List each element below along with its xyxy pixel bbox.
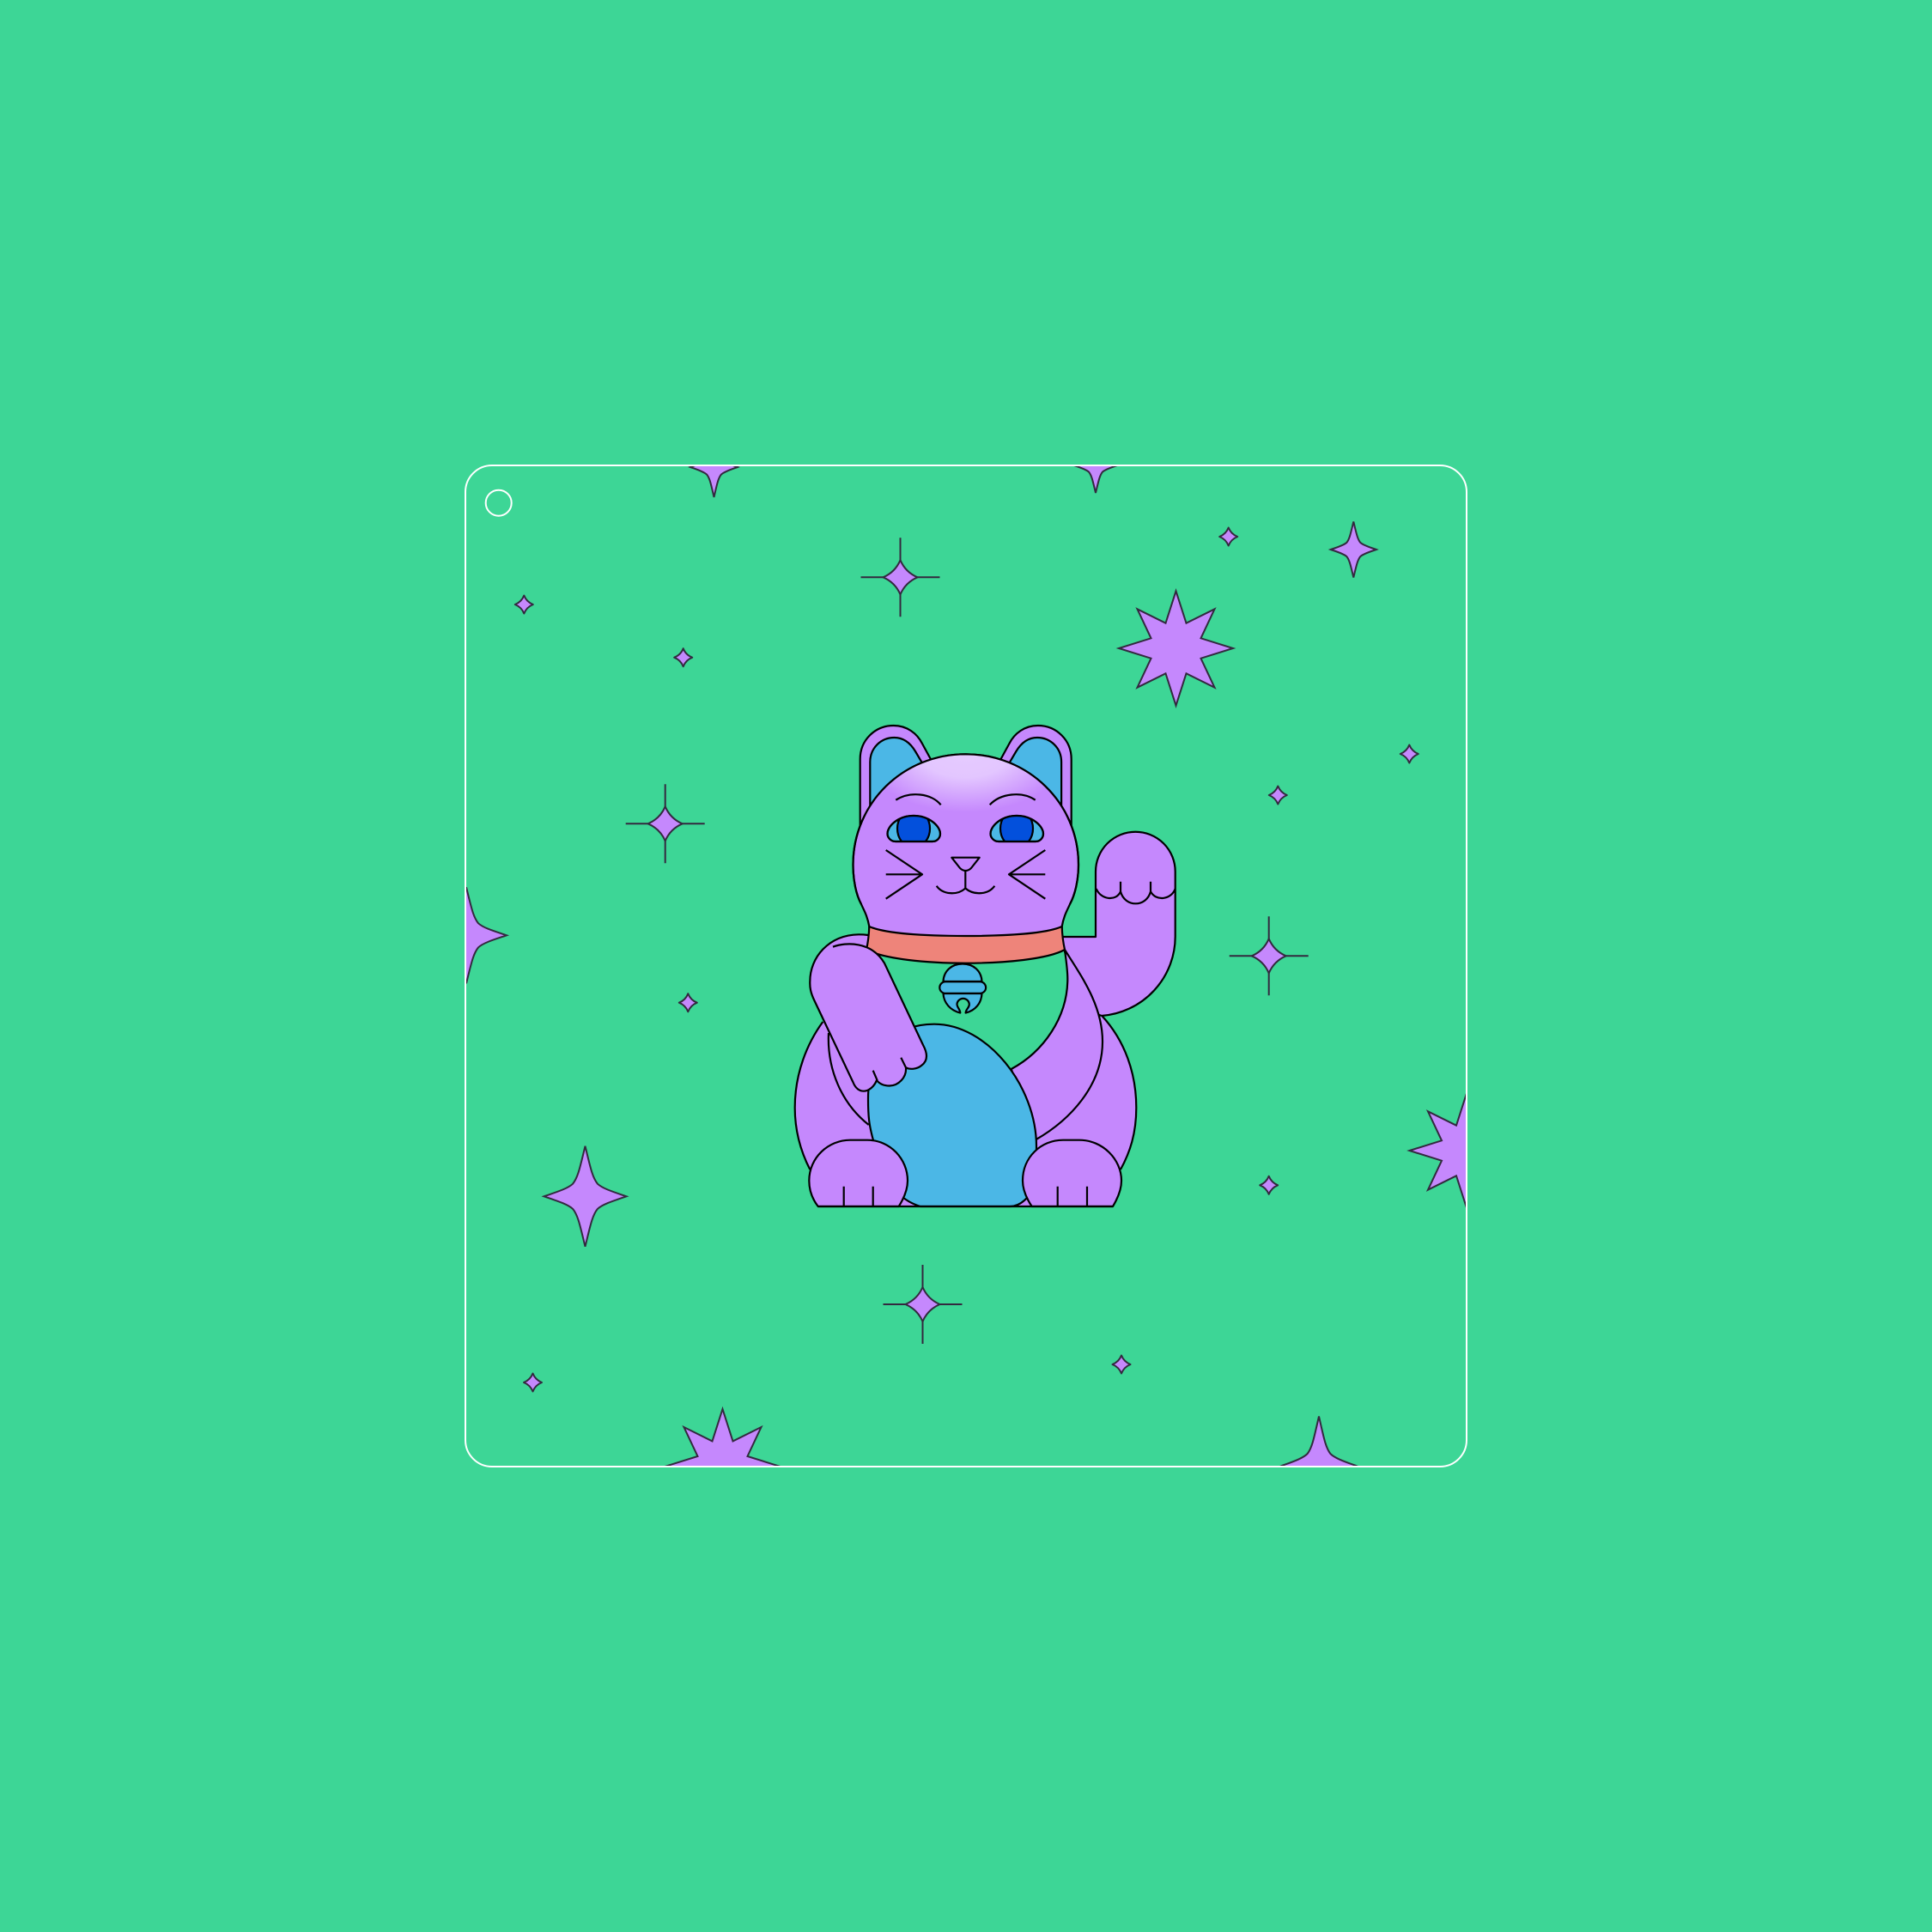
- star: tiny sparkle 5: [1269, 787, 1287, 804]
- star: large sparkle lower left: [544, 1146, 627, 1247]
- illustration: lucky cat: [795, 726, 1176, 1206]
- cat: body left side: [795, 1022, 945, 1206]
- star: cross sparkle right: [1230, 916, 1309, 995]
- frame: rounded white border: [465, 465, 1467, 1467]
- star: eight point burst top right: [1119, 591, 1233, 706]
- cat: right whiskers: [1009, 850, 1045, 899]
- icon: white corner circle: [486, 490, 512, 516]
- cat: left whiskers: [886, 850, 922, 899]
- star: cross sparkle top centre: [860, 538, 939, 617]
- star: tiny sparkle 8: [524, 1374, 542, 1391]
- star: eight point burst bottom edge: [665, 1406, 781, 1466]
- cat: mouth: [937, 871, 994, 893]
- cat: body right side: [987, 1016, 1136, 1206]
- star: tiny sparkle 6: [679, 993, 697, 1012]
- cat: lowered paw toes: [873, 1058, 906, 1080]
- cat: right ear: [999, 726, 1072, 829]
- cat: nose: [951, 858, 980, 871]
- star: tiny sparkle 7: [1260, 1176, 1278, 1194]
- icon: bell: [939, 963, 986, 1013]
- cat: torso crescent: [1012, 950, 1103, 1139]
- star: left edge sparkle: [466, 887, 509, 984]
- infographic canvas: [465, 465, 1467, 1467]
- star: eight point burst right edge: [1406, 1093, 1466, 1208]
- star: bottom edge sparkle: [1279, 1416, 1358, 1466]
- star: tiny sparkle 4: [1400, 745, 1419, 762]
- cat: left foot: [809, 1140, 908, 1206]
- cat: right eyebrow: [990, 794, 1036, 805]
- cat: right foot: [1023, 1140, 1121, 1206]
- cat: head top outline: [854, 754, 1078, 904]
- cat: head: [854, 754, 1078, 940]
- cat: blue belly: [868, 1024, 1036, 1206]
- star: tiny sparkle 9: [1113, 1355, 1130, 1374]
- cat: upper arm behind collar: [824, 934, 869, 960]
- cat: raised arm: [1060, 832, 1176, 1016]
- star: tiny sparkle 3: [1219, 527, 1237, 546]
- cat: head highlight: [854, 756, 1076, 816]
- star: cross sparkle left: [626, 784, 705, 863]
- panel: sparkle field: [465, 465, 1467, 1467]
- star: medium sparkle top right: [1331, 522, 1376, 577]
- cat: right eye: [989, 814, 1044, 843]
- star: top edge sparkle left: [688, 466, 740, 498]
- cat: left eye: [886, 814, 941, 843]
- cat: base line: [818, 1206, 1113, 1207]
- cat: left ear: [860, 726, 933, 829]
- star: tiny sparkle 2: [674, 648, 692, 666]
- cat: left eyebrow: [896, 794, 941, 805]
- cat: lowered arm and paw: [810, 934, 927, 1091]
- cat: salmon collar: [866, 927, 1065, 963]
- star: top edge sparkle right: [1073, 466, 1118, 493]
- cat: raised paw toes: [1097, 882, 1176, 903]
- star: cross sparkle bottom: [883, 1265, 962, 1344]
- star: tiny sparkle 1: [515, 596, 533, 613]
